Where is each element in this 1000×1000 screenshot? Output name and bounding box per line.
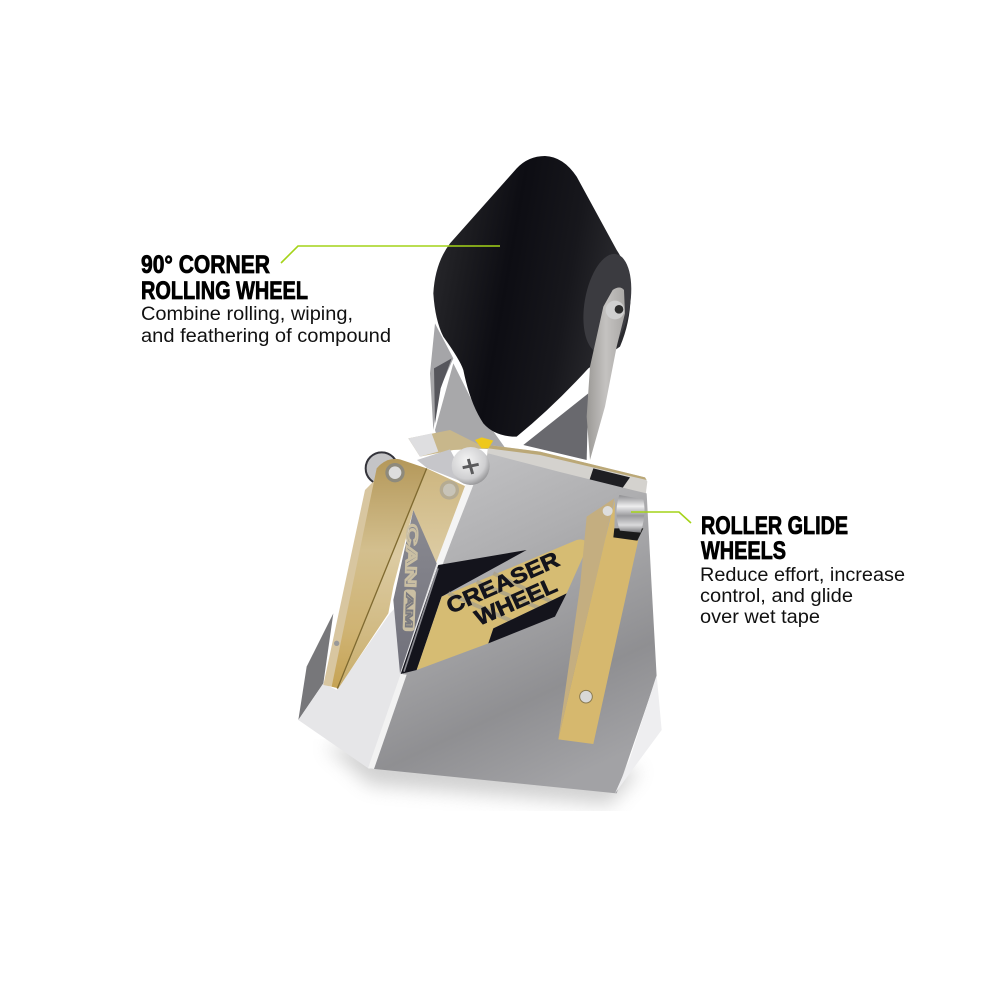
description: Combine rolling, wiping, — [141, 304, 353, 325]
callout: roller glide wheels — [631, 512, 905, 628]
axle bolt — [606, 301, 624, 319]
silver shoulder — [417, 449, 470, 485]
heading — [701, 512, 848, 565]
left gold arm — [332, 459, 427, 688]
description: control, and glide — [700, 586, 853, 607]
left roller — [366, 452, 398, 484]
main front panel — [368, 453, 657, 793]
rubber rolling wheel — [433, 156, 631, 437]
right gold arm — [558, 500, 638, 744]
bright panel edge lower — [368, 674, 407, 769]
heading: WHEELS — [701, 537, 786, 565]
callout: 90 degree corner rolling wheel — [141, 246, 500, 347]
left wheel bracket — [430, 323, 453, 430]
phillips screw — [452, 447, 490, 485]
wheel end cap — [576, 250, 638, 357]
left reflected gold panel — [338, 468, 465, 688]
logo: AM — [402, 593, 415, 628]
top left tab — [408, 430, 488, 457]
description — [700, 565, 905, 628]
bright panel edge upper — [435, 485, 473, 568]
right support plate — [523, 393, 588, 460]
label stripes — [448, 573, 552, 622]
stripe highlight — [404, 568, 438, 672]
right corner facet — [615, 675, 662, 793]
floor shadow — [325, 745, 640, 805]
tool body — [298, 430, 662, 793]
black label stripe — [401, 550, 527, 674]
silver tab tip — [408, 433, 438, 457]
description: over wet tape — [700, 607, 820, 628]
leader line — [281, 246, 500, 263]
label wording: CREASER — [443, 547, 563, 619]
right wheel arm — [587, 287, 625, 460]
rivets — [334, 463, 613, 703]
rear support plate — [435, 363, 507, 450]
right roller slot — [613, 528, 643, 541]
left mirror panel — [298, 485, 472, 768]
heading: ROLLER GLIDE — [701, 512, 848, 540]
rear lip — [487, 445, 647, 500]
description: Reduce effort, increase — [700, 565, 905, 586]
heading: 90° CORNER — [141, 251, 270, 279]
leader line — [631, 512, 691, 523]
description: and feathering of compound — [141, 326, 391, 347]
black label lower stripe — [488, 593, 567, 643]
gold rim — [488, 445, 647, 480]
dark slot — [588, 468, 630, 491]
heading — [141, 251, 308, 305]
label wording: WHEEL — [471, 572, 561, 631]
left arm shaded strip — [323, 477, 378, 687]
yellow marker — [475, 437, 493, 448]
left grey wedge — [298, 613, 333, 720]
gold label — [417, 540, 587, 670]
heading: ROLLING WHEEL — [141, 277, 308, 305]
product: creaser wheel tool — [298, 156, 662, 805]
logo — [401, 524, 420, 631]
right arm shaded strip — [558, 498, 614, 739]
right glide roller — [616, 495, 645, 533]
description — [141, 304, 391, 347]
upper wheel assembly — [430, 156, 638, 460]
left bracket opening — [434, 358, 452, 423]
logo panel — [393, 510, 437, 673]
logo: CAN — [401, 524, 420, 588]
arm edge line — [337, 468, 427, 689]
